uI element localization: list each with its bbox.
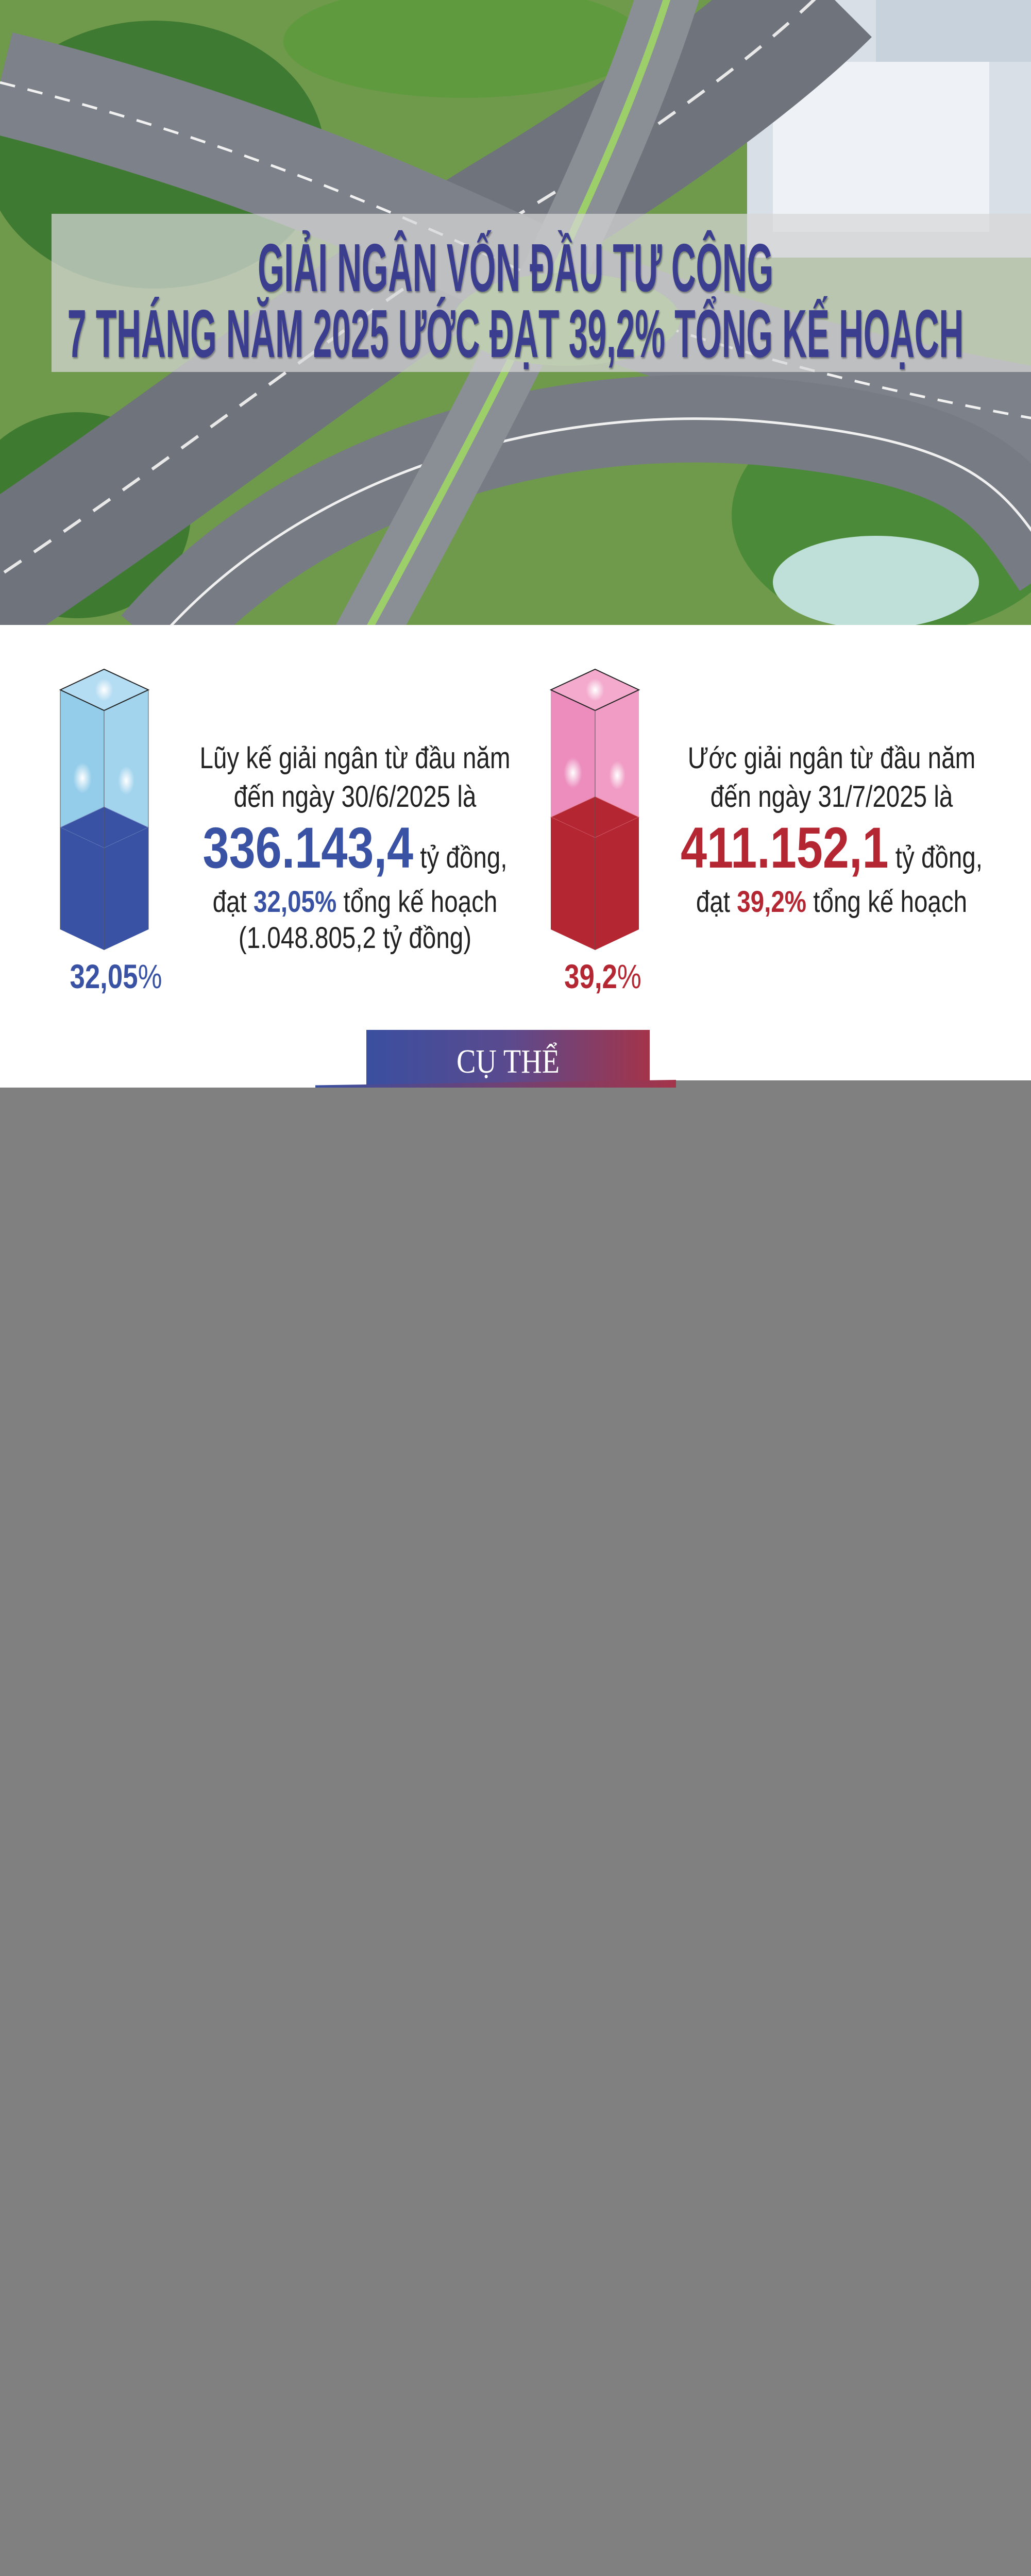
gray content area [676,1080,1031,1088]
text block: left stat: Lũy kế giải ngân từ đầu năm [200,741,510,775]
ribbon tail [315,1080,676,1088]
text block: left stat: đạt 32,05% tổng kế hoạch [213,885,497,919]
text block: left stat: đến ngày 30/6/2025 là [234,780,476,814]
bar icon: red 39,2% [550,669,640,950]
label: 39,2%: 39,2% [564,957,641,995]
text block: left stat [200,741,510,955]
text block: right stat: đạt 39,2% tổng kế hoạch [696,885,967,919]
bar icon: blue 32,05% [59,669,149,950]
label: 32,05%: 32,05% [70,957,162,995]
text block: right stat: đến ngày 31/7/2025 là [711,780,953,814]
text block: right stat: Ước giải ngân từ đầu năm [688,741,975,775]
title: GIẢI NGÂN VỐN ĐẦU TƯ CÔNG [258,230,773,306]
title band [52,214,1031,372]
text block: right stat: 411.152,1 tỷ đồng, [681,816,983,880]
section heading: CỤ THỂ: CỤ THỂ [457,1043,560,1080]
section heading: CỤ THỂ [366,1030,650,1088]
header image: aerial interchange [0,0,1031,625]
text block: left stat: (1.048.805,2 tỷ đồng) [239,921,471,955]
text block: left stat: 336.143,4 tỷ đồng, [202,816,508,880]
title [67,230,964,371]
text block: right stat [681,741,983,919]
title: 7 THÁNG NĂM 2025 ƯỚC ĐẠT 39,2% TỔNG KẾ HOẠCH [67,296,964,371]
